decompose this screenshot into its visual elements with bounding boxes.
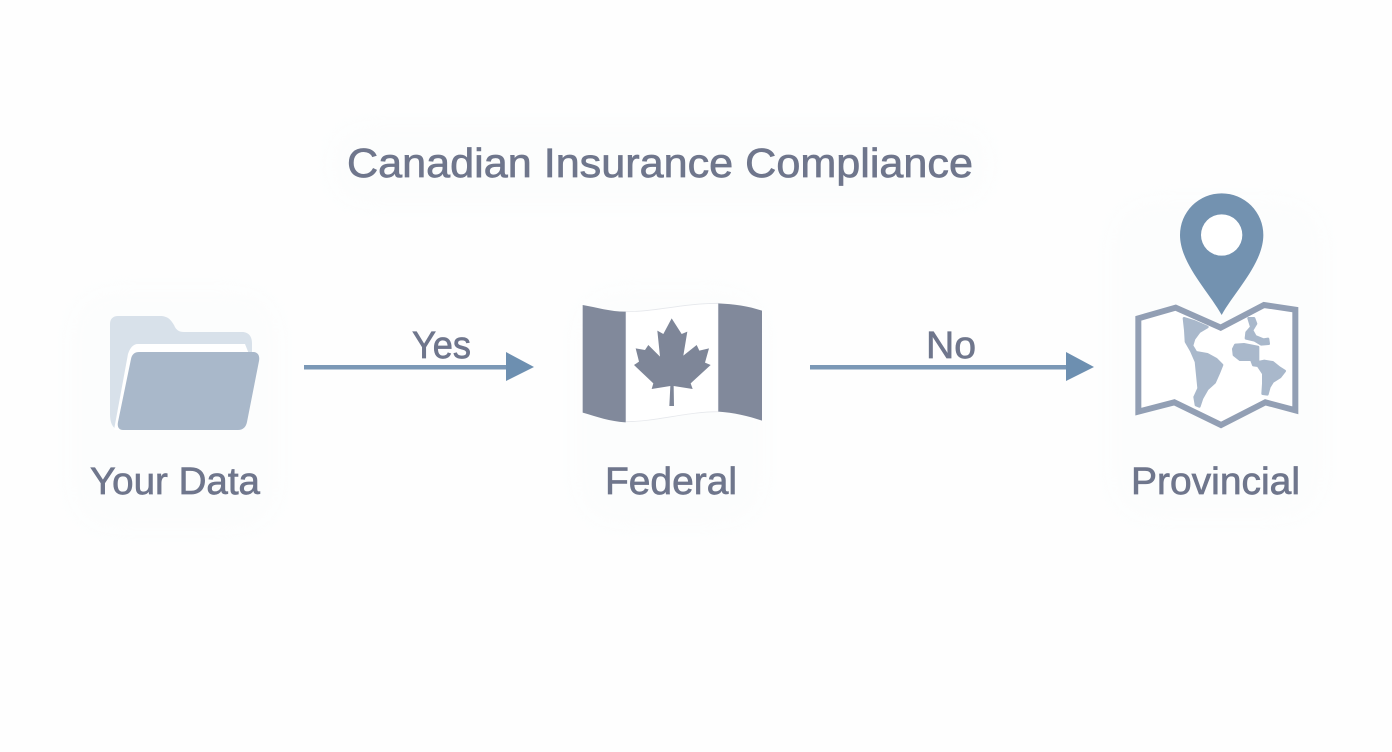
label: No: No <box>926 325 976 367</box>
label: Your Data: Your Data <box>90 461 261 503</box>
arrow: yes <box>304 352 534 381</box>
map continents <box>1184 318 1285 406</box>
icon: Canadian flag <box>583 303 762 422</box>
label: Yes: Yes <box>412 325 471 367</box>
title: Canadian Insurance Compliance <box>347 140 973 186</box>
icon: folder <box>110 316 259 430</box>
map outline <box>1138 305 1295 425</box>
label: Provincial: Provincial <box>1131 461 1300 503</box>
icon: map with location pin <box>1138 193 1295 425</box>
arrow: no <box>810 352 1094 381</box>
label: Federal: Federal <box>605 461 737 503</box>
location pin <box>1180 193 1263 315</box>
